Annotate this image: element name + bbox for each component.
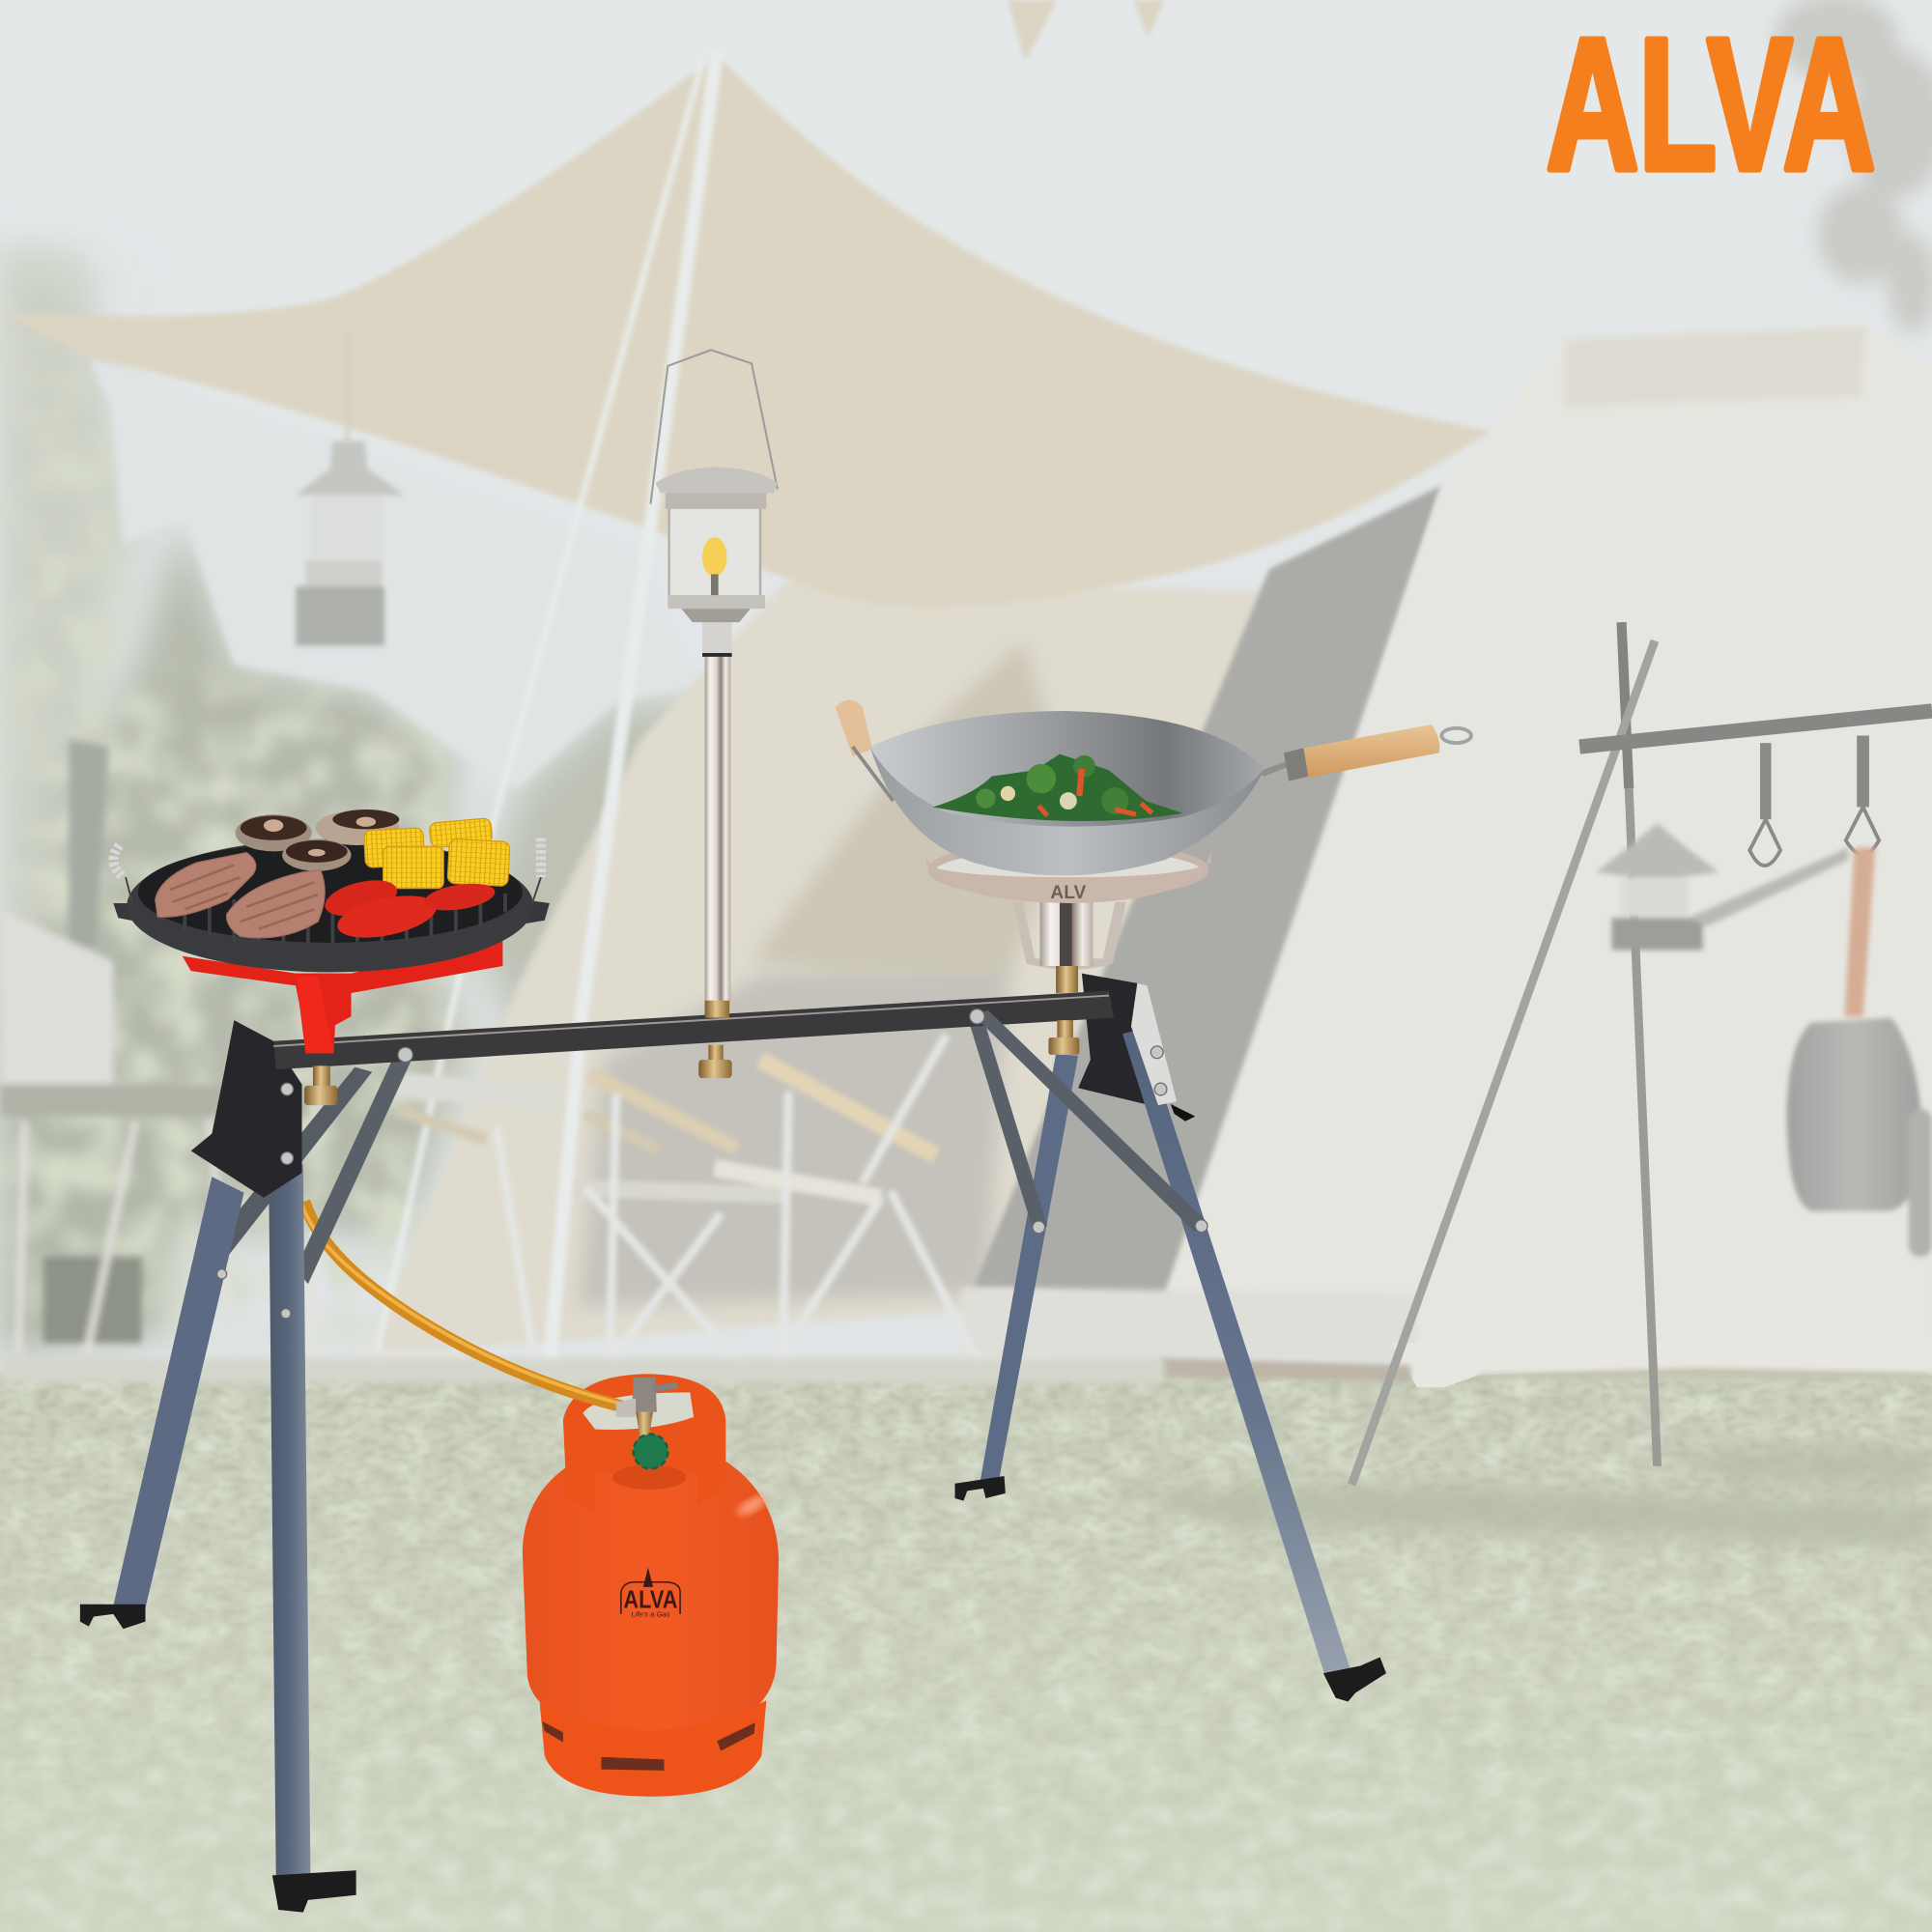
bunting bbox=[1008, 0, 1164, 62]
glass globe bbox=[669, 508, 760, 596]
wok side handle bbox=[836, 699, 894, 801]
cylinder logo: Life's a Gas bbox=[631, 1609, 670, 1618]
brass fittings bbox=[1048, 966, 1079, 1055]
lantern base bbox=[668, 595, 765, 622]
wok burner bbox=[836, 699, 1471, 1055]
gas valve and green knob bbox=[616, 1378, 678, 1468]
brass fittings bbox=[698, 1001, 732, 1078]
brass fitting bbox=[304, 1065, 337, 1105]
ring badge: ALV bbox=[1050, 883, 1087, 903]
burner body bbox=[1012, 902, 1126, 970]
left furniture bbox=[0, 739, 308, 1355]
cylinder base ring bbox=[540, 1700, 766, 1797]
tree shadows on grass bbox=[1109, 1448, 1932, 1547]
flame stem bbox=[711, 574, 719, 599]
gas cylinder bbox=[523, 1374, 779, 1797]
top beam bbox=[273, 991, 1114, 1069]
pan support ring bbox=[931, 845, 1205, 895]
highlight bbox=[735, 1492, 769, 1519]
red peppers bbox=[322, 874, 497, 946]
hooks bbox=[1749, 735, 1879, 866]
hanging lantern and pans bbox=[1596, 823, 1932, 1257]
steaks bbox=[156, 853, 325, 938]
right bracket bbox=[1078, 974, 1158, 1104]
foot: left front bbox=[272, 1870, 356, 1913]
camping tripod bbox=[1351, 622, 1932, 1485]
stir-fry food bbox=[933, 754, 1182, 821]
wire handles bbox=[114, 838, 541, 877]
back tent bbox=[370, 579, 1282, 1355]
gas lantern on chrome pole bbox=[650, 350, 778, 1078]
grill pan bbox=[113, 839, 550, 972]
stand: rear right leg bbox=[980, 1054, 1078, 1485]
pole collar bbox=[702, 622, 732, 657]
cylinder body bbox=[523, 1444, 779, 1740]
lantern cap bbox=[656, 467, 778, 509]
ring front band bbox=[926, 850, 1211, 903]
stand: cross brace bbox=[974, 1010, 1205, 1233]
left bracket bbox=[191, 1020, 301, 1198]
canopy bbox=[0, 55, 1491, 607]
foot: left outer bbox=[80, 1605, 146, 1629]
bolts bbox=[216, 1009, 1208, 1319]
white tent behind lantern bbox=[89, 357, 696, 788]
inner tent grey zone behind chairs bbox=[579, 961, 1010, 1306]
red support bbox=[183, 939, 502, 1054]
tent shadow panel bbox=[974, 486, 1441, 1296]
stand: right front leg bbox=[1122, 1029, 1351, 1678]
stand: left front leg bbox=[269, 1164, 310, 1875]
flame bbox=[702, 537, 727, 577]
tent ground strip bbox=[1159, 1358, 1932, 1381]
stand: left outer leg bbox=[113, 1177, 244, 1608]
tent poles bbox=[358, 52, 717, 1435]
grill on red bracket bbox=[113, 810, 550, 1105]
gas hose bbox=[301, 1202, 625, 1407]
pole bbox=[705, 622, 730, 1005]
wok bowl inside bbox=[870, 711, 1264, 827]
blurred lantern left bbox=[296, 332, 404, 645]
grass haze strip bbox=[0, 1358, 1164, 1382]
cylinder logo bbox=[621, 1567, 680, 1618]
foot: right front bbox=[1323, 1658, 1386, 1701]
main white tent bbox=[1164, 327, 1932, 1386]
tent bottom edge over grass bbox=[1392, 1343, 1932, 1387]
camp chairs bbox=[308, 1035, 980, 1378]
corn bbox=[364, 818, 510, 889]
mushrooms bbox=[236, 810, 399, 871]
cylinder logo: ALVA bbox=[623, 1587, 678, 1614]
wok bowl outside bbox=[870, 747, 1264, 875]
right bracket plate bbox=[1131, 983, 1195, 1122]
stand: braces bbox=[197, 1018, 1047, 1284]
trees top right bbox=[1775, 0, 1932, 332]
tree mass left bbox=[0, 246, 702, 1355]
wok handle: wood grip bbox=[1262, 724, 1471, 781]
grass bbox=[0, 1370, 1932, 1932]
foot: rear right bbox=[955, 1476, 1006, 1501]
handle links bbox=[126, 877, 541, 906]
collar bbox=[563, 1374, 725, 1511]
wire handle bbox=[650, 350, 778, 504]
